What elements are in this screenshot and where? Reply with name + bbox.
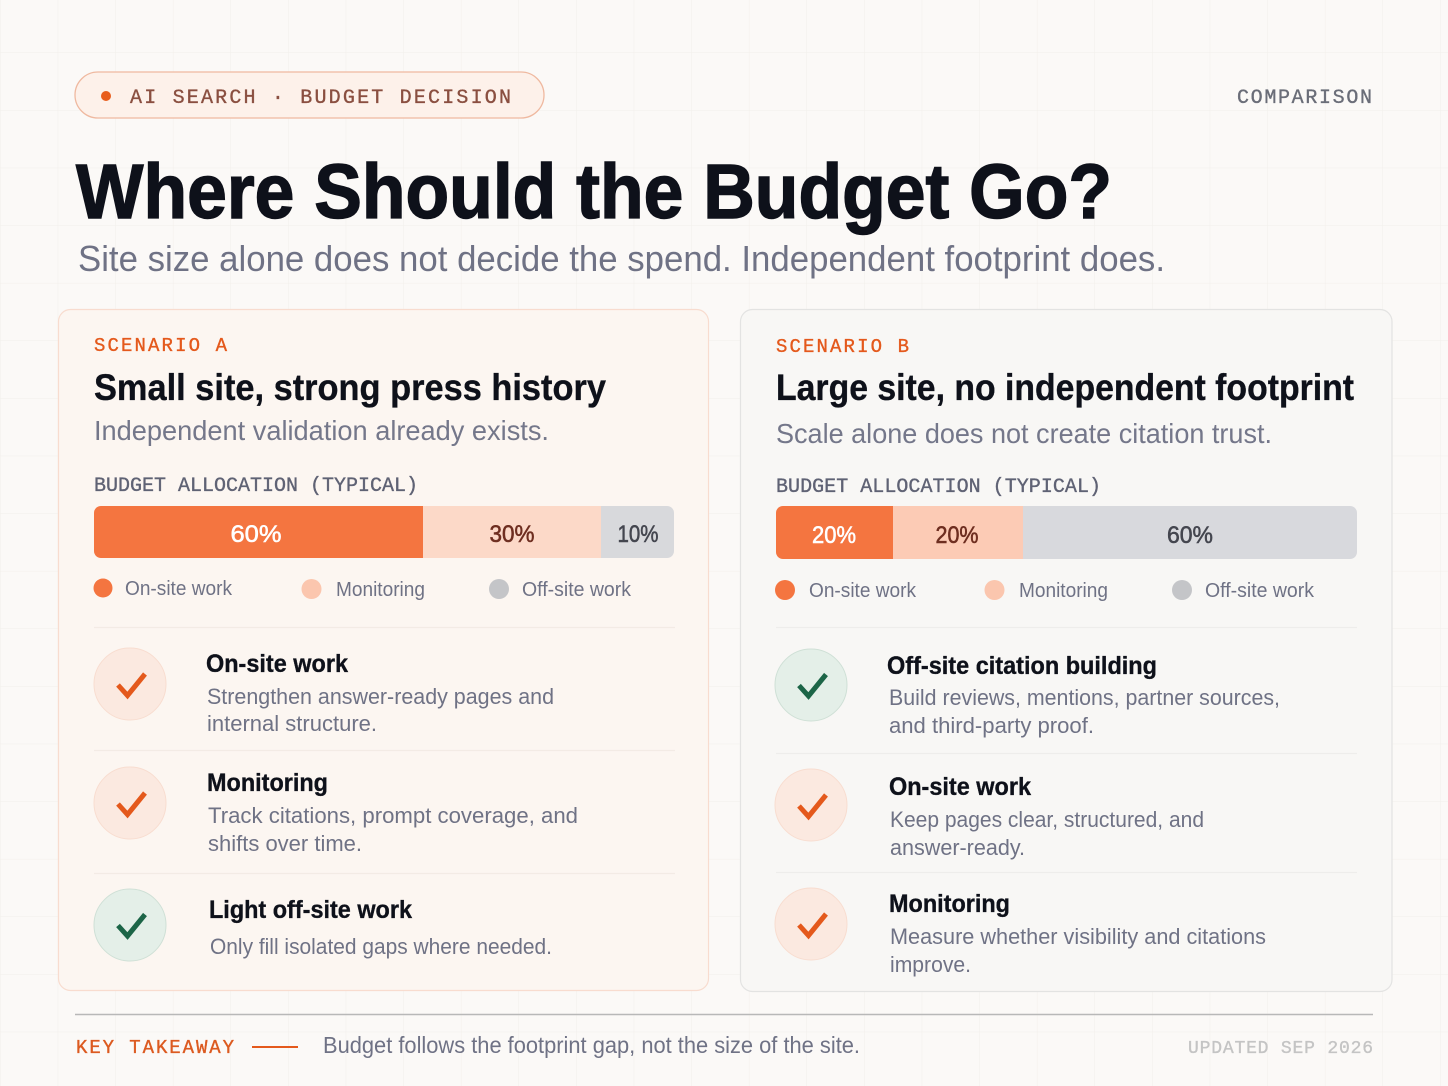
item: off-site citation building B: Off-site citation building [887, 652, 1157, 680]
stacked bar A [94, 506, 674, 558]
item: on-site work B: Keep pages clear, structured, and [890, 807, 1204, 832]
item: on-site work A: Strengthen answer-ready pages and [207, 684, 554, 709]
label: comparison: COMPARISON [1237, 87, 1372, 110]
legend B: Off-site work [1205, 580, 1315, 602]
legend A: Monitoring [336, 579, 425, 601]
item: monitoring B: Monitoring [889, 890, 1010, 918]
item: monitoring B: improve. [890, 952, 971, 977]
item: light off-site work A: Only fill isolated gaps where needed. [210, 934, 552, 959]
key takeaway label: KEY TAKEAWAY [76, 1037, 235, 1059]
badge: AI search budget decision: AI SEARCH · BUDGET DECISION [130, 87, 511, 110]
stacked bar B [776, 506, 1357, 559]
legend B: On-site work [809, 580, 917, 602]
title: Where Should the Budget Go? [76, 149, 1112, 235]
scenario B heading: Large site, no independent footprint [776, 367, 1354, 408]
stacked bar A: 60% [230, 521, 282, 548]
legend B: Monitoring [1019, 580, 1108, 602]
badge: AI search budget decision [75, 72, 544, 118]
item: on-site work B: answer-ready. [890, 835, 1025, 860]
stacked bar B: 20% [812, 522, 856, 549]
subtitle: Site size alone does not decide the spend. Independent footprint does. [78, 238, 1165, 279]
item: monitoring A: Monitoring [207, 769, 328, 797]
footer [75, 1014, 1373, 1059]
item: off-site citation building B: and third-party proof. [889, 713, 1094, 738]
stacked bar B: 60% [1167, 522, 1213, 549]
scenario A subheading: Independent validation already exists. [94, 415, 549, 446]
panel: scenario A [58, 310, 708, 990]
item: monitoring A: Track citations, prompt coverage, and [208, 803, 578, 828]
item: on-site work A: internal structure. [207, 711, 377, 736]
key takeaway text: Budget follows the footprint gap, not the size of the site. [323, 1032, 860, 1058]
scenario A heading: Small site, strong press history [94, 367, 606, 408]
panel: scenario B [740, 310, 1392, 992]
item: light off-site work A: Light off-site work [209, 896, 412, 924]
legend B [775, 580, 1315, 602]
item: light off-site work A [94, 889, 552, 961]
legend A: On-site work [125, 578, 233, 600]
item: off-site citation building B [775, 649, 1280, 738]
scenario A label: SCENARIO A [94, 335, 228, 357]
budget allocation label A: BUDGET ALLOCATION (TYPICAL) [94, 475, 418, 498]
stacked bar A: 30% [490, 521, 534, 548]
item: on-site work A: On-site work [206, 650, 348, 678]
scenario B label: SCENARIO B [776, 336, 909, 358]
scenario B subheading: Scale alone does not create citation trust. [776, 418, 1272, 449]
stacked bar B: 20% [936, 522, 978, 549]
stacked bar A: 10% [618, 521, 658, 548]
item: monitoring B [775, 888, 1266, 977]
item: on-site work B: On-site work [889, 773, 1031, 801]
item: monitoring A [94, 767, 578, 856]
item: monitoring A: shifts over time. [208, 831, 362, 856]
updated date: UPDATED SEP 2026 [1188, 1039, 1373, 1059]
legend A: Off-site work [522, 579, 632, 601]
item: monitoring B: Measure whether visibility and citations [890, 924, 1266, 949]
item: off-site citation building B: Build reviews, mentions, partner sources, [889, 685, 1280, 710]
item: on-site work B [775, 769, 1204, 860]
item: on-site work A [94, 648, 554, 736]
legend A [94, 578, 632, 601]
budget allocation label B: BUDGET ALLOCATION (TYPICAL) [776, 476, 1101, 499]
